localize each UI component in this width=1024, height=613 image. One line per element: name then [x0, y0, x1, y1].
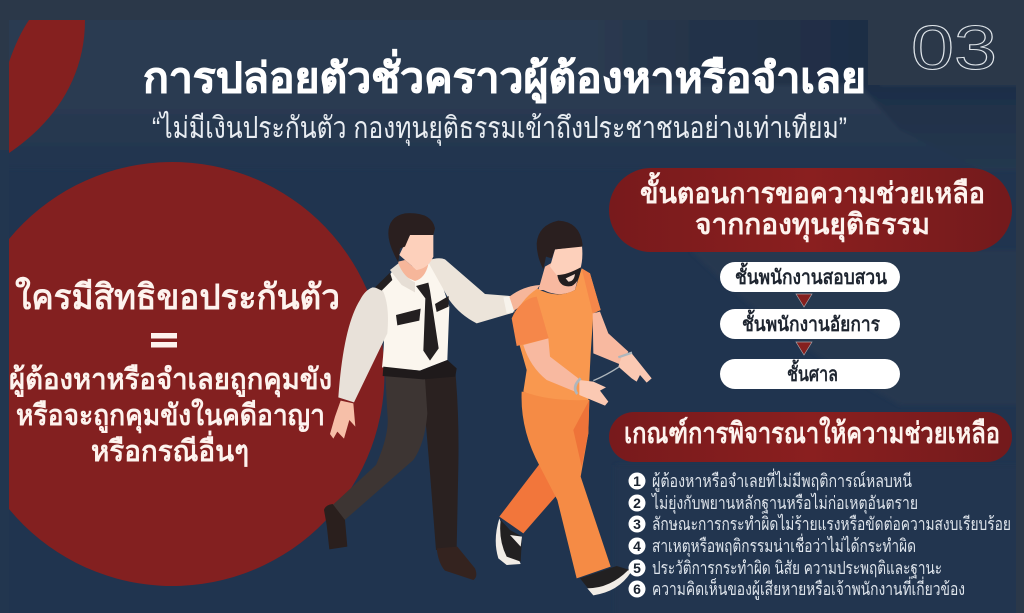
- criterion 2: [628, 492, 918, 514]
- pill text line 2: จากกองทุนยุติธรรม: [695, 209, 930, 242]
- prisoner near leg and trousers: [522, 392, 611, 578]
- officer far arm: [427, 258, 513, 323]
- step 1 pill: [720, 262, 900, 292]
- step 2 pill: [720, 309, 900, 339]
- officer: [324, 213, 540, 580]
- prisoner shirt: [513, 268, 601, 400]
- prisoner: [496, 221, 652, 595]
- prisoner right sleeve: [582, 268, 601, 313]
- illustration: officer escorting prisoner: [324, 213, 652, 595]
- criterion 2: 2: [633, 495, 641, 511]
- criterion 1: 1: [633, 473, 641, 489]
- equals sign: [151, 333, 177, 348]
- criterion 4: 4: [633, 538, 641, 554]
- criteria list: [628, 468, 1011, 600]
- arrow 1: [796, 294, 812, 307]
- prisoner near shoe: [580, 566, 630, 595]
- prisoner left sleeve: [512, 297, 549, 346]
- prisoner far shoe: [496, 518, 521, 565]
- criterion 1: [628, 468, 912, 492]
- officer pockets: [396, 309, 421, 325]
- prisoner right hand: [618, 353, 652, 383]
- prisoner face: [550, 246, 582, 282]
- officer hand on shoulder: [509, 285, 540, 311]
- officer face: [399, 234, 433, 270]
- prisoner left arm: [523, 338, 578, 392]
- criterion 3: 3: [633, 516, 641, 532]
- answer line 3: หรือกรณีอื่นๆ: [91, 430, 249, 468]
- prisoner hair: [537, 221, 583, 269]
- prisoner right arm: [593, 312, 628, 365]
- step 2 pill: ชั้นพนักงานอัยการ: [742, 309, 880, 336]
- number badge 03: 03: [911, 14, 997, 83]
- step 3 pill: [720, 359, 900, 389]
- officer shoes: [324, 504, 347, 549]
- officer tie: [416, 283, 439, 361]
- officer epaulet: [375, 273, 392, 291]
- officer near arm: [338, 287, 388, 402]
- red pill: criteria heading: [609, 412, 1012, 462]
- left panel text: who has the right: [9, 276, 340, 468]
- prisoner trouser shadow: [573, 400, 589, 467]
- red pill: request process heading: [609, 168, 1012, 252]
- officer belt: [383, 360, 457, 379]
- prisoner left hand: [579, 380, 608, 406]
- officer near leg: [333, 375, 427, 521]
- criterion 6: 6: [633, 581, 641, 597]
- arrow 2: [796, 342, 812, 355]
- big red circle panel: [9, 162, 384, 586]
- handcuffs: [575, 353, 632, 394]
- step 3 pill: ชั้นศาล: [787, 359, 838, 386]
- criterion 1: ผู้ต้องหาหรือจำเลยที่ไม่มีพฤติการณ์หลบหนี: [652, 468, 912, 492]
- officer collar: [390, 263, 415, 292]
- decorative red arc top left: [9, 20, 85, 153]
- officer far leg: [423, 368, 459, 550]
- criterion 2: ไม่ยุ่งกับพยานหลักฐานหรือไม่ก่อเหตุอันตราย: [650, 492, 918, 514]
- answer line 1: ผู้ต้องหาหรือจำเลยถูกคุมขัง: [9, 364, 332, 397]
- heading: who can request bail: ใครมีสิทธิขอประกันตัว: [15, 276, 340, 317]
- criterion 4: สาเหตุหรือพฤติกรรมน่าเชื่อว่าไม่ได้กระทำผิด: [652, 533, 916, 557]
- officer body: [382, 263, 449, 371]
- officer neck: [398, 260, 428, 281]
- criterion 4: [628, 533, 916, 557]
- officer hand: [330, 401, 355, 439]
- prisoner beard: [557, 267, 581, 286]
- answer line 2: หรือจะถูกคุมขังในคดีอาญา: [16, 398, 325, 433]
- criterion 5: 5: [633, 560, 641, 576]
- officer hair: [388, 213, 435, 262]
- prisoner mouth: [566, 274, 575, 282]
- officer cuff: [503, 296, 515, 313]
- criterion 6: [628, 576, 965, 600]
- pill text line 1: ขั้นตอนการขอความช่วยเหลือ: [640, 171, 985, 210]
- prisoner neck and chest: [538, 260, 580, 294]
- step 1 pill: ชั้นพนักงานสอบสวน: [735, 262, 887, 289]
- prisoner far leg: [499, 463, 558, 533]
- title: การปล่อยตัวชั่วคราวผู้ต้องหาหรือจำเลย: [143, 49, 866, 104]
- subtitle: “ไม่มีเงินประกันตัว กองทุนยุติธรรมเข้าถึงประชาชนอย่างเท่าเทียม”: [152, 110, 847, 147]
